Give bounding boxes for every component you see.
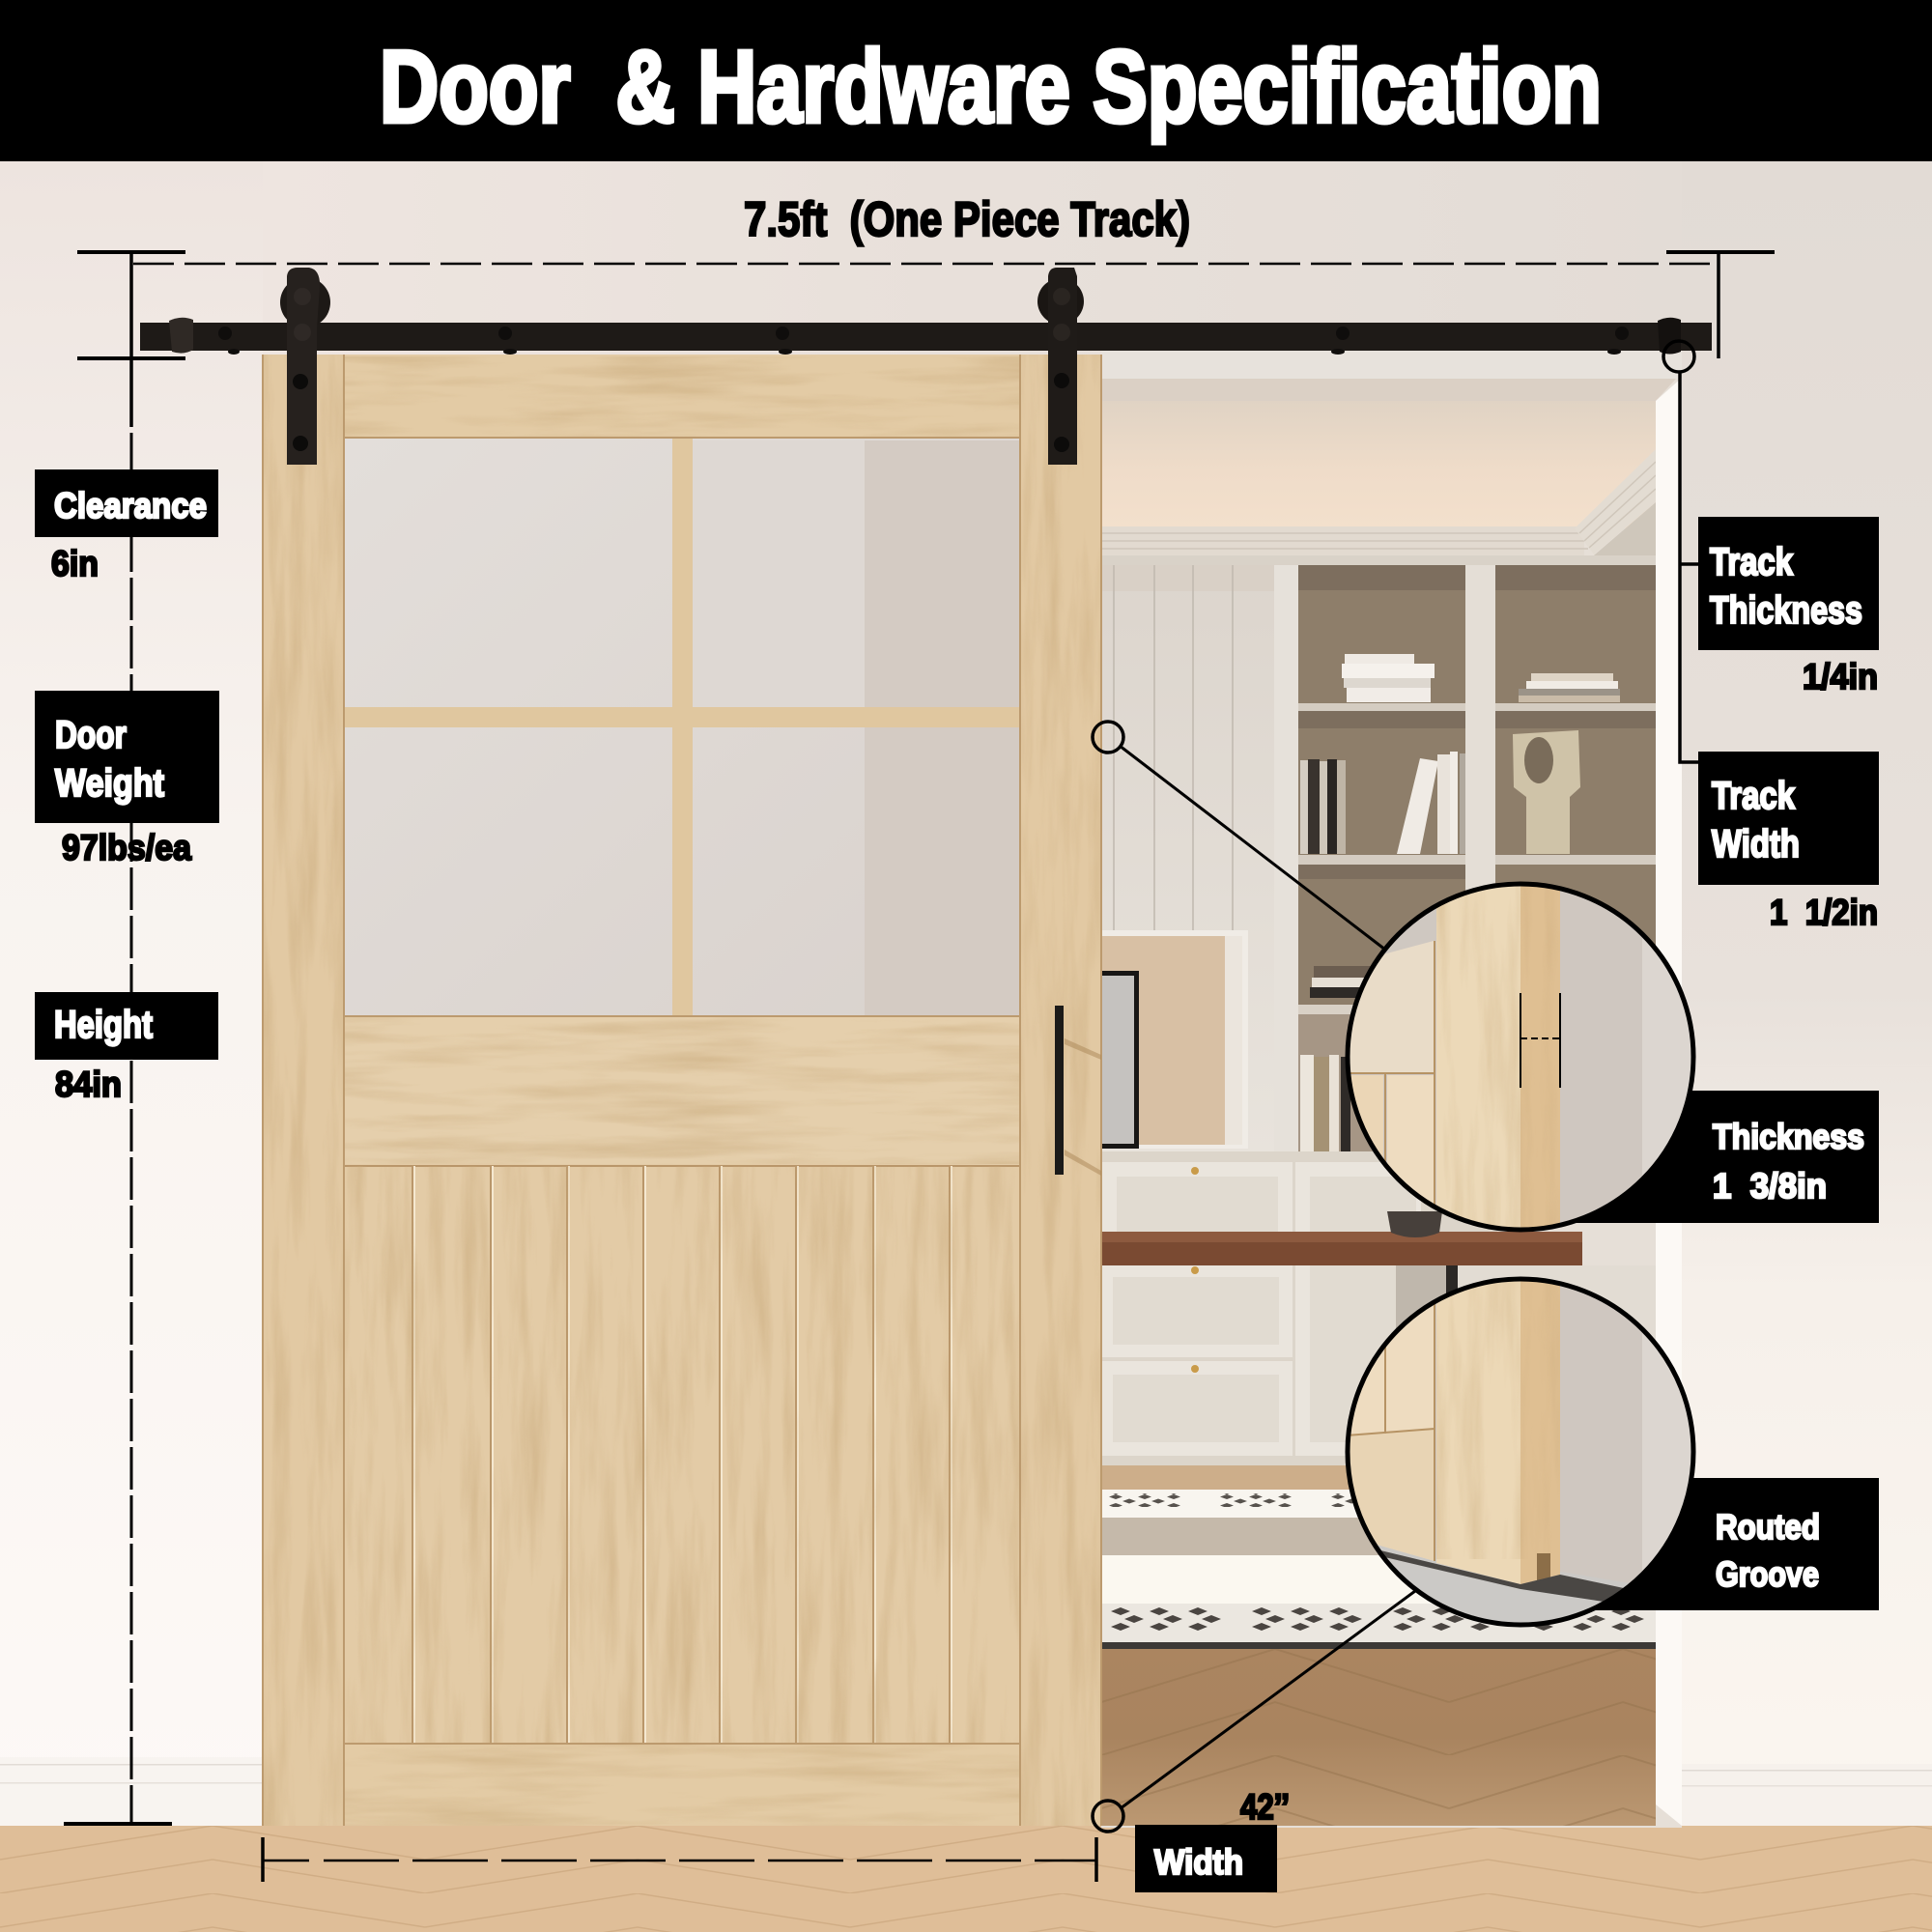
track length label: 7.5ft (One Piece Track) <box>744 192 1190 246</box>
door edge <box>1520 884 1560 1232</box>
label: clearance: 6in <box>51 544 99 583</box>
track bolts <box>218 327 1629 355</box>
crown molding <box>1101 449 1656 565</box>
top rail <box>344 356 1020 438</box>
right hanger <box>1037 268 1084 465</box>
back wall beside desk <box>1396 1265 1656 1652</box>
sculpture <box>1513 730 1580 854</box>
glass window panes <box>344 438 1020 1016</box>
width dimension line <box>263 1837 1096 1882</box>
label: height: 84in <box>55 1065 122 1104</box>
title: Door & Hardware Specification <box>380 30 1602 144</box>
label: track thickness <box>1698 517 1879 696</box>
barn door <box>263 355 1101 1826</box>
label: routed groove: Routed <box>1716 1507 1820 1547</box>
magnifier: routed groove detail <box>1347 1279 1700 1633</box>
paneled wall <box>1101 565 1285 1156</box>
main floor <box>0 1826 1932 1932</box>
label: clearance <box>35 469 218 583</box>
label: height <box>35 992 218 1104</box>
window muntins <box>344 438 1020 1016</box>
track length dimension line <box>77 252 1775 358</box>
recessed panels <box>1350 941 1435 1205</box>
end stop right <box>1658 318 1681 354</box>
label: width: Width <box>1154 1842 1243 1882</box>
label: thickness: Thickness <box>1713 1117 1864 1156</box>
middle rail <box>344 1016 1020 1164</box>
ceiling <box>1101 401 1656 528</box>
left stile <box>263 355 344 1826</box>
books <box>1300 654 1620 1151</box>
floor <box>1347 1536 1694 1633</box>
door face <box>1436 884 1520 1232</box>
bookshelf <box>1274 565 1656 1156</box>
lintel <box>1101 350 1682 401</box>
label: width <box>1135 1787 1290 1892</box>
label: width: 42’’ <box>1240 1787 1290 1827</box>
label: thickness <box>1546 1091 1879 1223</box>
right stile <box>1020 355 1101 1826</box>
label: track width: 1 1/2in <box>1770 893 1878 932</box>
label: door weight: 97lbs/ea <box>62 828 191 867</box>
label: height: Height <box>54 1004 153 1046</box>
label: track width: Width <box>1712 823 1800 866</box>
label: track width: Track <box>1712 775 1796 817</box>
wood grain <box>263 355 1101 1826</box>
baseboards <box>0 1757 1932 1826</box>
room floor and rug <box>1101 1465 1656 1826</box>
thickness tick marks <box>1520 993 1560 1088</box>
bowl <box>1387 1211 1442 1237</box>
framed art <box>1102 930 1248 1149</box>
door face <box>1436 1279 1520 1584</box>
room seen through the opening <box>1101 350 1682 1828</box>
sliding track <box>140 318 1712 355</box>
magnifier: door thickness detail <box>1347 884 1700 1232</box>
label: routed groove: Groove <box>1716 1554 1819 1594</box>
door pull handle <box>1055 1006 1101 1176</box>
label: track width <box>1698 752 1879 932</box>
callout connectors <box>1093 341 1698 1832</box>
cabinet drawers <box>1101 1151 1497 1466</box>
door edge with groove <box>1520 1279 1560 1584</box>
table <box>1102 1232 1582 1304</box>
label: thickness: 1 3/8in <box>1713 1166 1827 1206</box>
header bar <box>0 0 1932 161</box>
height dimension line <box>64 252 185 1824</box>
door jamb <box>1656 378 1682 1826</box>
label: track thickness: Thickness <box>1710 589 1862 632</box>
bottom rail <box>344 1744 1020 1826</box>
door panels <box>1350 1305 1434 1561</box>
label: door weight: Weight <box>55 762 164 805</box>
end stop left <box>169 318 193 354</box>
label: clearance: Clearance <box>54 486 207 526</box>
label: track thickness: 1/4in <box>1803 657 1878 696</box>
plank panel <box>344 1164 1020 1744</box>
label: routed groove <box>1546 1478 1879 1610</box>
label: track thickness: Track <box>1710 541 1794 583</box>
label: door weight <box>35 691 219 867</box>
left hanger <box>280 268 330 465</box>
label: door weight: Door <box>55 714 127 756</box>
